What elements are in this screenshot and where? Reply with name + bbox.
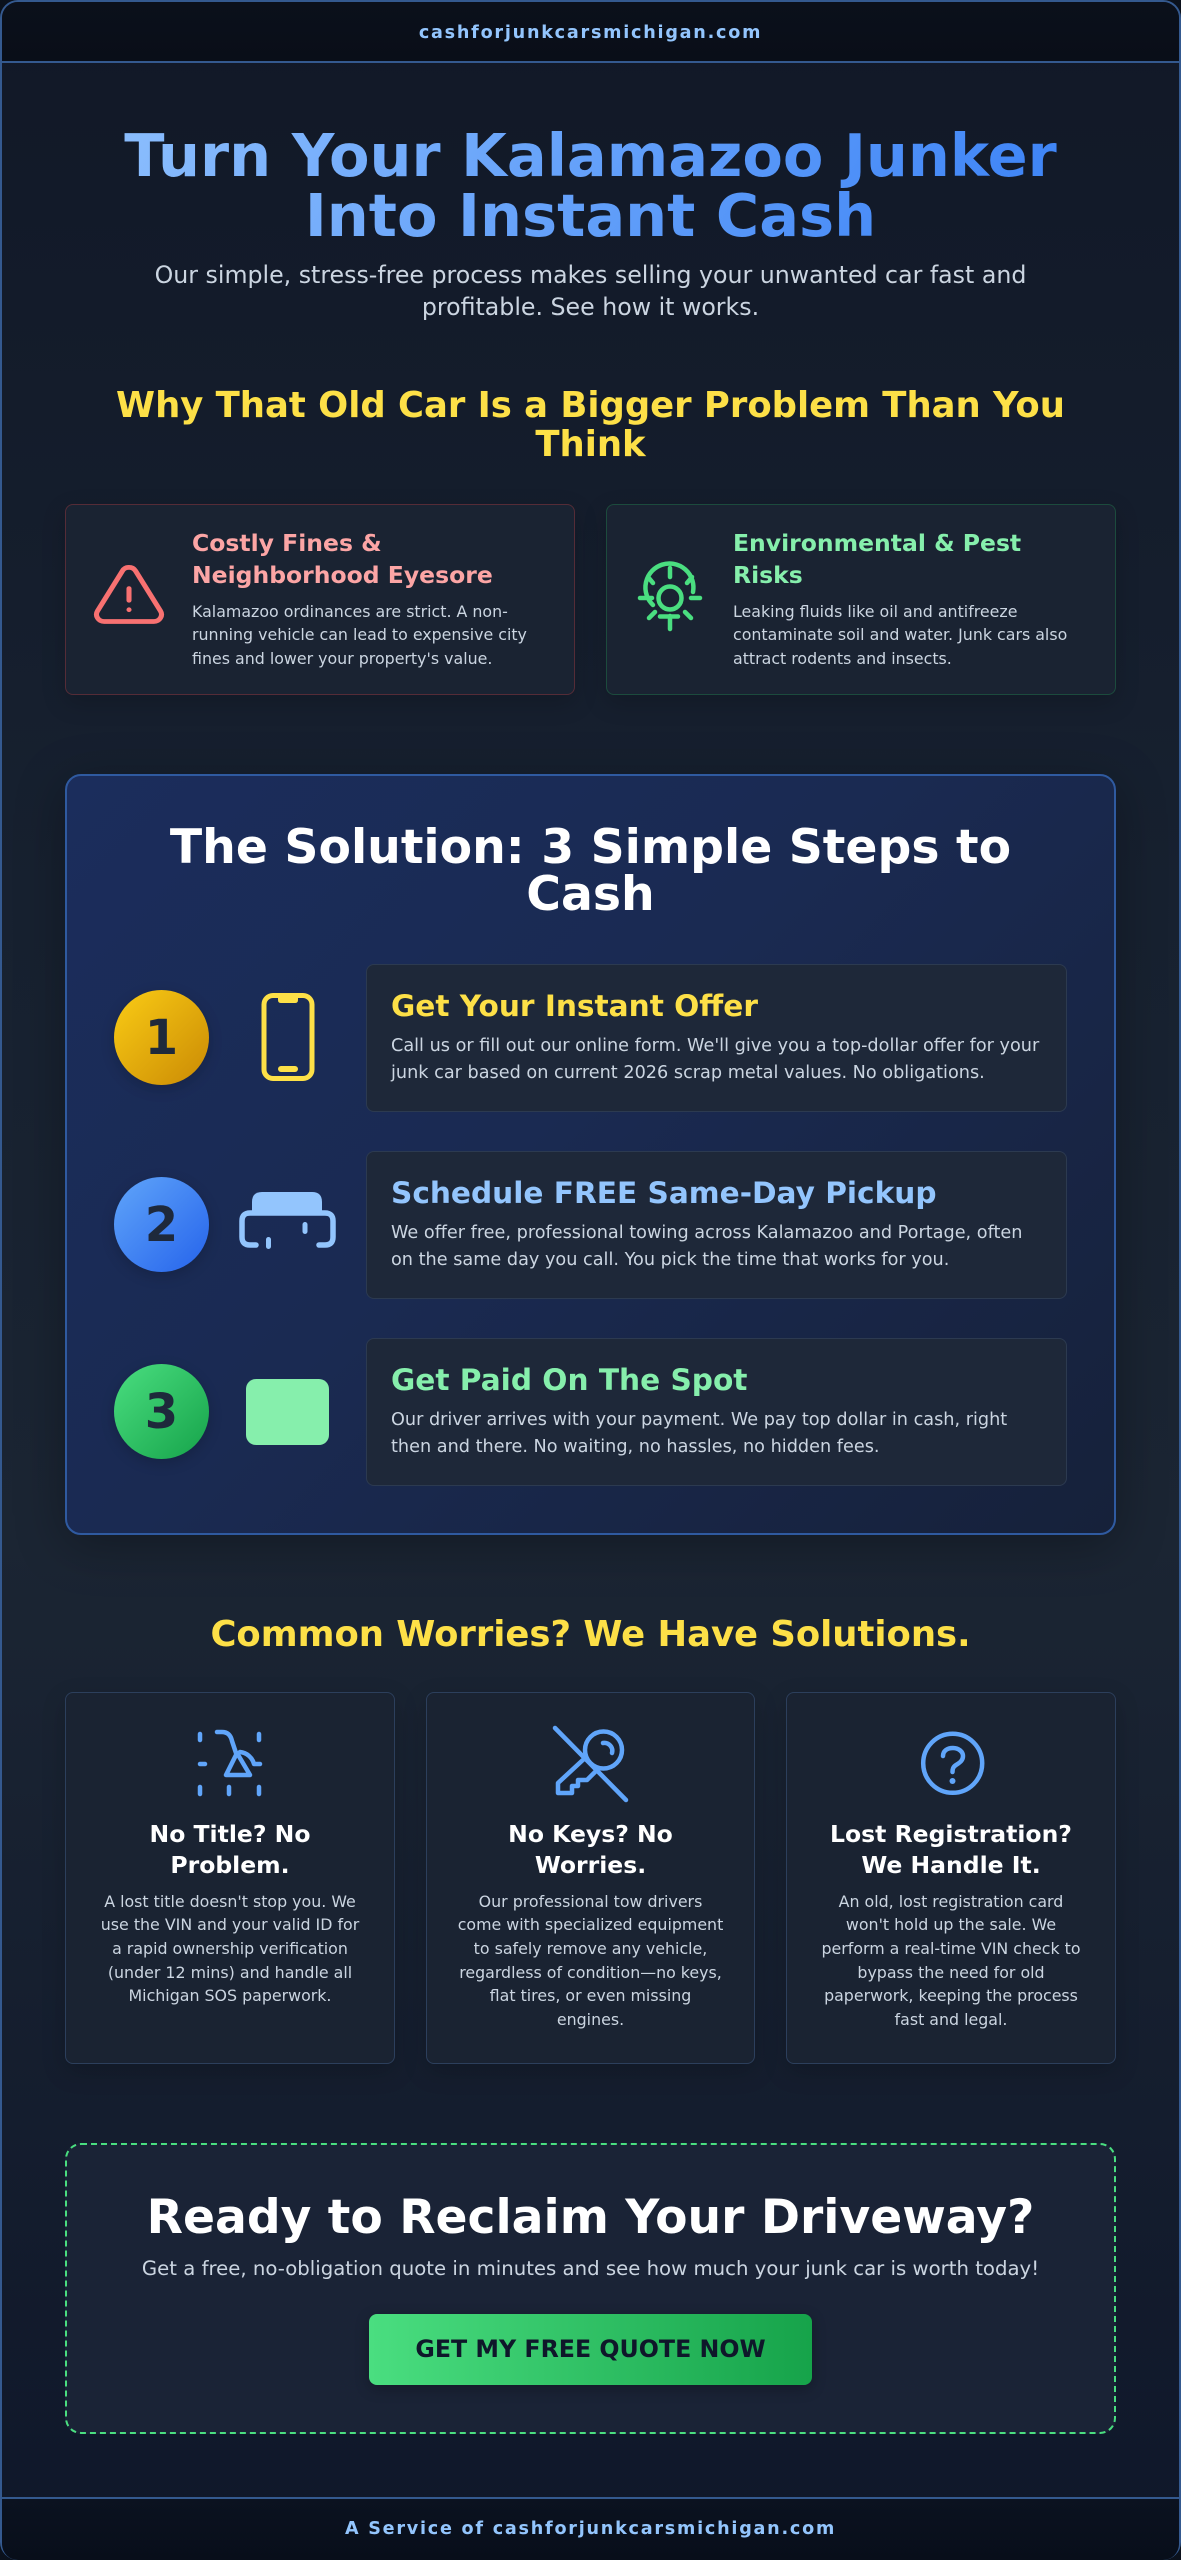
step number 1: 1 <box>145 1010 178 1066</box>
panel: no title <box>65 1692 395 2064</box>
icon: cash <box>246 1379 329 1445</box>
card body: Leaking fluids like oil and antifreeze <box>733 602 1017 620</box>
problem section heading <box>116 385 1065 465</box>
problem section heading: Why That Old Car Is a Bigger Problem Than You <box>116 385 1065 426</box>
card body: fines and lower your property's value. <box>192 649 492 668</box>
card body: Our professional tow drivers <box>479 1892 702 1910</box>
step 3 text <box>391 1410 1007 1457</box>
step 3 text: then and there. No waiting, no hassles, no hidden fees. <box>391 1437 880 1457</box>
icon: crossed key <box>552 1726 628 1802</box>
card body: engines. <box>557 2010 624 2029</box>
subtitle: Our simple, stress-free process makes selling your unwanted car fast and <box>155 260 1026 288</box>
card body: won't hold up the sale. We <box>846 1915 1056 1934</box>
title: Into Instant Cash <box>305 181 876 250</box>
step 2 text <box>391 1222 1022 1270</box>
card body: bypass the need for old <box>857 1963 1045 1982</box>
panel: no keys <box>426 1692 755 2064</box>
card body: regardless of condition—no keys, <box>459 1963 722 1982</box>
panel: solution steps <box>65 774 1116 1535</box>
step 1 heading: Get Your Instant Offer <box>391 989 758 1023</box>
step 2 heading: Schedule FREE Same-Day Pickup <box>391 1176 937 1210</box>
card heading: Lost Registration? <box>830 1820 1072 1848</box>
icon: question mark <box>920 1732 984 1795</box>
step 1 text: junk car based on current 2026 scrap metal values. No obligations. <box>391 1063 985 1083</box>
step number 3 <box>114 1364 209 1459</box>
footer text: A Service of cashforjunkcarsmichigan.com <box>345 2519 836 2539</box>
card body: fast and legal. <box>895 2010 1007 2029</box>
step 3 <box>114 1338 1067 1486</box>
step number 2 <box>114 1177 209 1272</box>
step card 2 <box>366 1151 1067 1299</box>
solution heading: Cash <box>526 866 655 922</box>
card body: use the VIN and your valid ID for <box>101 1915 359 1934</box>
card body: An old, lost registration card <box>839 1892 1063 1910</box>
card body: come with specialized equipment <box>458 1915 723 1934</box>
card body: a rapid ownership verification <box>112 1939 348 1958</box>
cta button <box>369 2314 812 2385</box>
cta text: Get a free, no-obligation quote in minutes and see how much your junk car is worth today! <box>142 2257 1039 2280</box>
step 3 text: Our driver arrives with your payment. We pay top dollar in cash, right <box>391 1410 1007 1430</box>
card heading: Worries. <box>535 1851 646 1879</box>
card body <box>733 602 1067 668</box>
card body <box>458 1892 723 2029</box>
card heading <box>192 529 493 588</box>
step 2 text: We offer free, professional towing across Kalamazoo and Portage, often <box>391 1222 1022 1242</box>
panel: environmental risks <box>606 504 1116 695</box>
card body: (under 12 mins) and handle all <box>108 1963 352 1982</box>
card body: contaminate soil and water. Junk cars also <box>733 625 1067 644</box>
header bar <box>2 2 1179 63</box>
card heading <box>150 1820 310 1879</box>
step 1 text <box>390 1036 1040 1083</box>
header domain text: cashforjunkcarsmichigan.com <box>419 22 762 42</box>
card body: Michigan SOS paperwork. <box>129 1986 331 2005</box>
card heading <box>733 529 1021 588</box>
step 2 text: on the same day you call. You pick the time that works for you. <box>391 1250 949 1270</box>
card body: perform a real-time VIN check to <box>821 1939 1081 1958</box>
title: Turn Your Kalamazoo Junker <box>124 121 1057 190</box>
panel: call to action <box>65 2143 1116 2434</box>
card heading: No Keys? No <box>508 1820 673 1848</box>
card body: attract rodents and insects. <box>733 649 952 668</box>
solution heading: The Solution: 3 Simple Steps to <box>170 820 1011 874</box>
card heading: No Title? No <box>150 1820 310 1848</box>
cta button: GET MY FREE QUOTE NOW <box>415 2335 766 2363</box>
icon: tow truck <box>239 1192 336 1249</box>
card body: paperwork, keeping the process <box>824 1986 1078 2005</box>
subtitle <box>155 260 1026 320</box>
step number 3: 3 <box>145 1384 178 1440</box>
icon: title document missing <box>198 1730 262 1796</box>
card heading: Neighborhood Eyesore <box>192 560 493 588</box>
card heading <box>508 1820 673 1879</box>
card body <box>101 1892 360 2005</box>
card heading <box>830 1820 1072 1879</box>
step number 1 <box>114 990 209 1085</box>
step 3 heading: Get Paid On The Spot <box>391 1363 747 1397</box>
card body <box>192 602 527 668</box>
card body: running vehicle can lead to expensive city <box>192 625 527 644</box>
card body <box>821 1892 1081 2029</box>
card heading: Problem. <box>170 1851 290 1879</box>
icon: bug <box>638 561 702 632</box>
card body: Kalamazoo ordinances are strict. A non- <box>192 602 508 620</box>
cta heading: Ready to Reclaim Your Driveway? <box>147 2190 1034 2244</box>
card heading: Costly Fines & <box>192 529 382 557</box>
solution heading <box>170 820 1011 922</box>
step 1 text: Call us or fill out our online form. We'll give you a top-dollar offer for your <box>391 1036 1039 1056</box>
title <box>124 121 1057 250</box>
card heading: Environmental & Pest <box>733 529 1021 557</box>
card heading: We Handle It. <box>861 1851 1041 1879</box>
step 1 <box>114 964 1067 1112</box>
panel: lost registration <box>786 1692 1116 2064</box>
subtitle: profitable. See how it works. <box>422 292 759 320</box>
icon: phone <box>262 993 314 1081</box>
step 2 <box>114 1151 1067 1299</box>
card body: A lost title doesn't stop you. We <box>104 1892 356 1910</box>
step number 2: 2 <box>145 1197 178 1253</box>
card heading: Risks <box>733 560 803 588</box>
card body: to safely remove any vehicle, <box>474 1939 707 1958</box>
worries heading: Common Worries? We Have Solutions. <box>210 1614 971 1655</box>
step card 1 <box>366 964 1067 1112</box>
footer bar <box>2 2497 1179 2560</box>
icon: warning triangle <box>94 565 164 624</box>
step card 3 <box>366 1338 1067 1486</box>
problem section heading: Think <box>535 424 646 465</box>
card body: flat tires, or even missing <box>490 1986 691 2005</box>
panel: costly fines <box>65 504 575 695</box>
